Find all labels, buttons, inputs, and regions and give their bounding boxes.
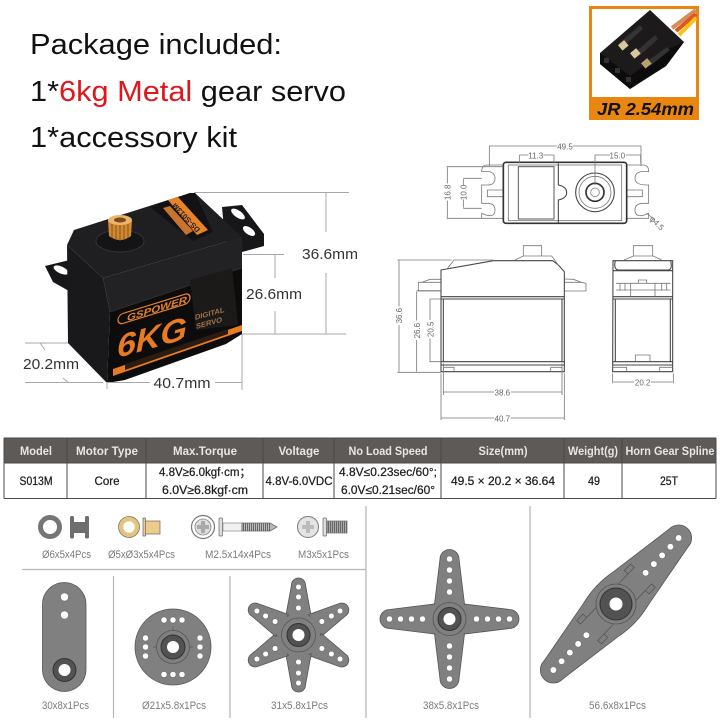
accessory panel dividers bbox=[22, 506, 530, 718]
icon: connector housing bbox=[600, 10, 684, 89]
servo photo bbox=[45, 193, 264, 383]
connector badge: JR 2.54mm bbox=[589, 6, 699, 120]
dimensions: side view: 40.7 bbox=[495, 414, 511, 423]
dimension: 40.7mm: 40.7mm bbox=[154, 375, 210, 392]
table row: S013M: 6.0V≤0.21sec/60° bbox=[341, 485, 435, 497]
horn: disc 21x5.8 bbox=[135, 609, 211, 712]
table header labels: Voltage bbox=[278, 444, 320, 458]
dimension: 26.6mm: 26.6mm bbox=[246, 286, 302, 303]
dimension: 20.2mm: 20.2mm bbox=[23, 356, 79, 373]
dimensions: top view bbox=[443, 143, 666, 233]
table row: S013M: 6.0V≥6.8kgf·cm bbox=[162, 485, 248, 497]
dimensions: side view: 36.6 bbox=[395, 307, 404, 323]
table header bbox=[4, 438, 716, 463]
table row: S013M: 4.8V≤0.23sec/60°; bbox=[339, 467, 437, 479]
drawing: end view bbox=[613, 246, 673, 387]
heading: package included bbox=[30, 29, 346, 154]
caption: 31x5.8x1Pcs bbox=[271, 700, 328, 712]
table row: S013M: 4.8V≥6.0kgf·cm； bbox=[159, 467, 251, 479]
body: top face bbox=[67, 193, 242, 278]
icon: connector wires bbox=[672, 10, 696, 35]
table row: S013M bbox=[20, 467, 678, 497]
caption: M2.5x14x4Pcs bbox=[205, 549, 271, 561]
text: accessory line: 1*accessory kit bbox=[30, 122, 237, 154]
table header labels: Weight(g) bbox=[568, 444, 618, 458]
table row: S013M: 49.5 × 20.2 × 36.64 bbox=[451, 476, 556, 488]
brand: 6KG: 6KG bbox=[117, 309, 187, 365]
servo dimension lines bbox=[25, 192, 349, 390]
strip: spec band bbox=[113, 325, 242, 376]
caption: Ø6x5x4Pcs bbox=[42, 549, 91, 561]
specification table bbox=[4, 438, 716, 498]
table header labels: Max.Torque bbox=[173, 444, 237, 458]
table header labels: Size(mm) bbox=[478, 444, 528, 458]
drawing: side view bbox=[418, 246, 586, 372]
dimensions: side view: 38.6 bbox=[495, 388, 511, 397]
table header labels: Model bbox=[20, 444, 52, 458]
caption: Ø5xØ3x5x4Pcs bbox=[108, 549, 175, 561]
flange: left bbox=[45, 258, 103, 308]
dimensions: top view: 11.3 bbox=[528, 152, 544, 161]
table row: S013M: 4.8V-6.0VDC bbox=[266, 476, 332, 488]
accessory: brass bushing bbox=[108, 516, 175, 561]
horn: long arm 56.6x8 bbox=[525, 510, 707, 712]
caption: Ø21x5.8x1Pcs bbox=[142, 700, 206, 712]
technical drawings bbox=[395, 143, 673, 423]
body: front upper band bbox=[103, 237, 242, 312]
accessory: M3 screw bbox=[298, 516, 349, 561]
dimensions: top view: 15.0 bbox=[610, 151, 626, 160]
table row: S013M: S013M bbox=[20, 476, 52, 488]
brand: digital servo bbox=[195, 305, 225, 331]
dimensions: side view: 26.6 bbox=[413, 322, 422, 338]
brand: digital servo: DIGITAL bbox=[195, 305, 225, 322]
horn: six arm star 31x5.8 bbox=[243, 578, 354, 712]
brand: GSPOWER: GSPOWER bbox=[127, 295, 187, 324]
dimensions: side view bbox=[395, 260, 564, 423]
gear: brass output shaft bbox=[96, 215, 144, 252]
dimensions: top view: 49.5 bbox=[557, 143, 573, 152]
label: JR 2.54mm: JR 2.54mm bbox=[597, 99, 694, 119]
horn: cross 38x5.8 bbox=[380, 550, 519, 712]
dimensions: side view: 20.5 bbox=[426, 321, 435, 337]
table row: S013M: 49 bbox=[588, 476, 600, 488]
table header labels bbox=[20, 444, 715, 458]
caption: 30x8x1Pcs bbox=[42, 700, 89, 712]
drawing: top view bbox=[482, 162, 649, 223]
table header labels: No Load Speed bbox=[348, 444, 428, 458]
top sticker bbox=[150, 193, 213, 241]
accessory: M2.5 screw bbox=[192, 516, 277, 561]
servo photo: DS-S013M bbox=[170, 201, 202, 234]
dimensions: top view: 10.0 bbox=[460, 184, 469, 200]
table row: S013M: Core bbox=[94, 476, 120, 488]
table row: S013M: 25T bbox=[660, 476, 678, 488]
dimension: 36.6mm: 36.6mm bbox=[302, 246, 358, 263]
body: front label bbox=[107, 268, 242, 383]
brand: GSPOWER bbox=[118, 293, 190, 327]
text: servo line: 1*6kg Metal gear servo bbox=[30, 76, 346, 108]
dimensions: top view: φ4.5 bbox=[648, 214, 666, 233]
caption: 56.6x8x1Pcs bbox=[589, 700, 646, 712]
brand: digital servo: SERVO bbox=[196, 315, 222, 331]
caption: M3x5x1Pcs bbox=[298, 549, 349, 561]
table body bbox=[4, 463, 716, 498]
drawing: end view: 20.2 bbox=[635, 378, 651, 387]
accessory: gray grommet bbox=[40, 516, 91, 561]
body: left face bbox=[67, 245, 110, 383]
flange: right bbox=[222, 205, 264, 252]
text: package title: Package included: bbox=[30, 29, 282, 61]
dimensions: top view: 16.8 bbox=[443, 184, 452, 200]
table header labels: Motor Type bbox=[76, 444, 138, 458]
horn: oval 30x8 bbox=[42, 582, 89, 712]
caption: 38x5.8x1Pcs bbox=[423, 700, 479, 712]
